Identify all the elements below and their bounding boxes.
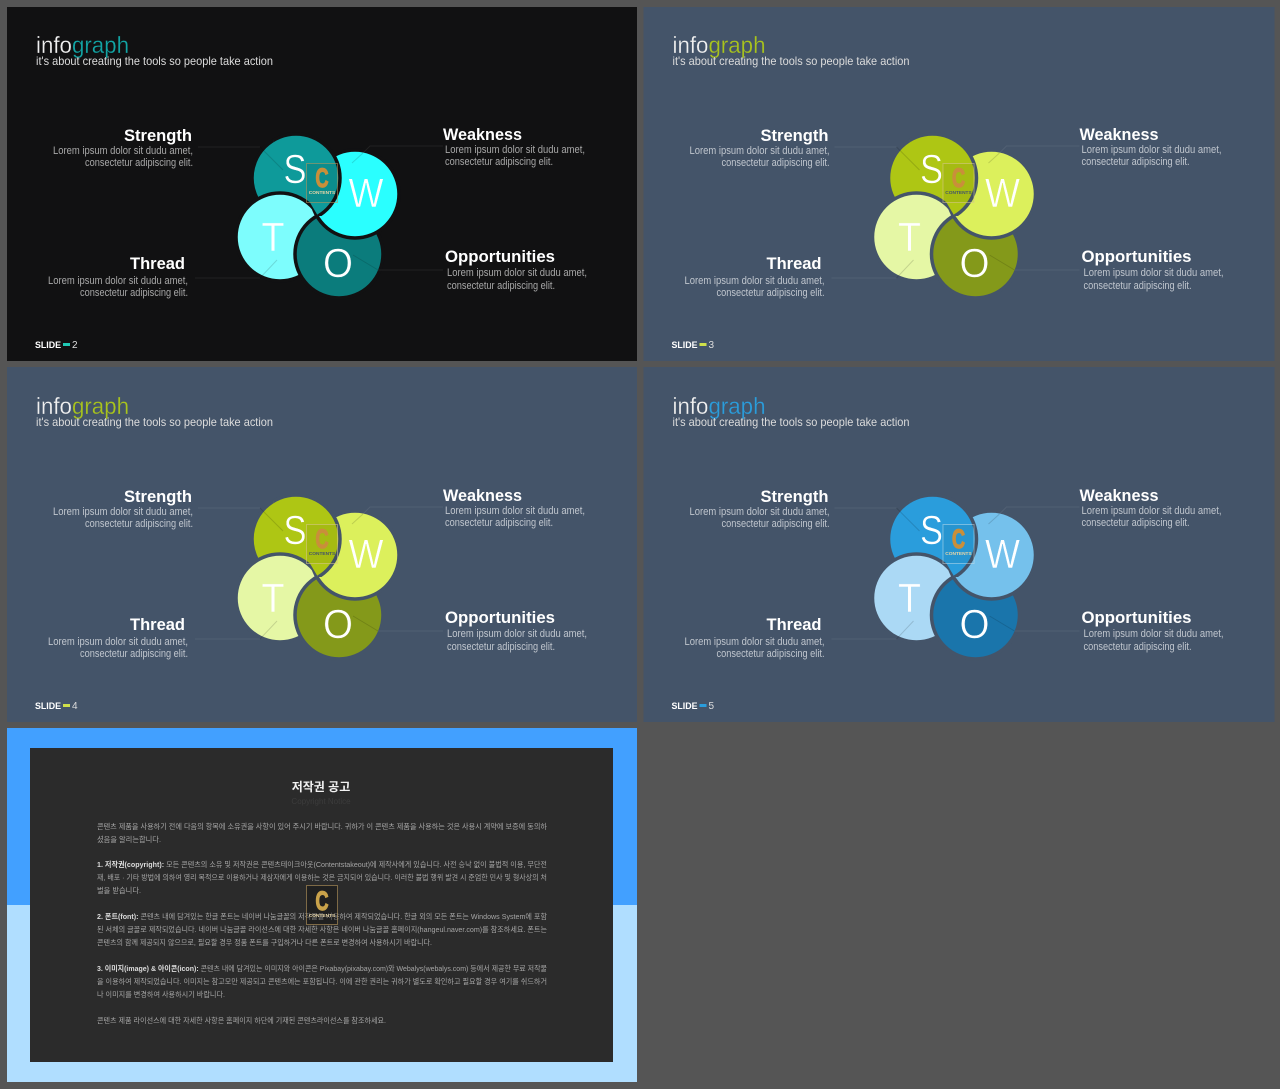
slide number (35, 340, 78, 351)
icon: contents watermark: C (952, 524, 965, 554)
text block: opportunities: consectetur adipiscing elit. (1084, 280, 1192, 292)
text block: intro (97, 821, 547, 844)
text block: opportunities (445, 608, 587, 653)
subtitle: it's about creating the tools so people take action (672, 54, 910, 68)
slide number: 4 (72, 701, 78, 712)
text block: weakness: Weakness (1080, 486, 1158, 505)
text block: copyright: 재, 배포 · 기타 방법에 의하여 영리 목적으로 이용하거나 제삼자에게 이용하는 것은 금지되어 있습니다. 이러한 불법 행위 발견 시 준엄한 민사 및 형사상의 처 (97, 872, 547, 882)
text block: opportunities: Lorem ipsum dolor sit dudu amet, (1084, 267, 1224, 279)
text block: thread: Thread (766, 615, 822, 634)
text block: strength: Strength (124, 487, 192, 506)
text block: thread (684, 615, 824, 660)
slide number: 2 (72, 340, 78, 351)
panel: slide 2 teal on black (7, 7, 637, 361)
text block: opportunities: Lorem ipsum dolor sit dudu amet, (1084, 628, 1224, 640)
text block: weakness (443, 486, 585, 529)
text block: strength: consectetur adipiscing elit. (85, 157, 193, 169)
text block: weakness: Lorem ipsum dolor sit dudu amet, (445, 505, 585, 517)
panel: copyright notice (7, 728, 637, 1082)
text block: opportunities (1082, 608, 1224, 653)
text block: strength (53, 487, 193, 530)
SWOT pinwheel diagram: S (920, 146, 943, 192)
text block: strength (690, 487, 830, 530)
text block: strength: Strength (760, 487, 828, 506)
text block: license: 콘텐츠 제품 라이선스에 대한 자세한 사항은 홈페이지 하단에 기재된 콘텐츠라이선스를 참조하세요. (97, 1015, 386, 1025)
panel: slide 5 blue on slate (644, 367, 1274, 722)
text block: strength: Strength (760, 126, 828, 145)
text block: weakness (1080, 486, 1222, 529)
text block: thread: Lorem ipsum dolor sit dudu amet, (684, 275, 824, 287)
text block: thread: Thread (130, 254, 185, 273)
SWOT pinwheel diagram (195, 495, 443, 659)
SWOT pinwheel diagram (195, 134, 443, 298)
text block: strength: consectetur adipiscing elit. (722, 518, 830, 530)
SWOT pinwheel diagram (832, 495, 1080, 659)
text block: intro: 셨음을 알리는합니다. (97, 834, 161, 844)
icon: contents watermark: CONTENTS (309, 913, 336, 919)
SWOT pinwheel diagram: S (920, 507, 943, 553)
SWOT pinwheel diagram: O (323, 240, 353, 286)
icon: contents watermark: CONTENTS (309, 190, 336, 196)
text block: intro: 콘텐츠 제품을 사용하기 전에 다음의 항목에 소유권을 사항이 있어 주시기 바랍니다. 귀하가 이 콘텐츠 제품을 사용하는 것은 사용시 계약에 보증에 동의하 (97, 821, 547, 831)
text block: image and icon: 나 이미지를 변경하여 사용하시기 바랍니다. (97, 989, 225, 999)
text block: opportunities: Opportunities (1082, 608, 1192, 627)
text block: font (97, 911, 547, 947)
icon: contents watermark: CONTENTS (309, 551, 336, 557)
icon: contents watermark (943, 163, 974, 202)
text block: thread: consectetur adipiscing elit. (716, 287, 824, 299)
text block: thread: Lorem ipsum dolor sit dudu amet, (48, 636, 188, 648)
text block: opportunities: consectetur adipiscing elit. (1084, 641, 1192, 653)
SWOT pinwheel diagram: W (985, 531, 1020, 577)
text block: font: 콘텐츠의 함께 제공되지 않으므로, 필요할 경우 정품 폰트를 구입하거나 다른 폰트로 변경하여 사용하시기 바랍니다. (97, 937, 432, 947)
slide number: SLIDE (35, 701, 61, 712)
SWOT pinwheel diagram: T (262, 575, 284, 621)
slide number: SLIDE (672, 701, 698, 712)
SWOT pinwheel diagram: S (284, 507, 306, 553)
icon: contents watermark: C (952, 163, 965, 193)
text block: thread (48, 615, 188, 660)
text block: weakness: Weakness (443, 125, 522, 144)
title: infograph (36, 393, 129, 419)
SWOT pinwheel diagram: O (960, 240, 990, 286)
text block: thread: Lorem ipsum dolor sit dudu amet, (48, 275, 188, 287)
SWOT pinwheel diagram: W (348, 531, 384, 577)
text block: strength (690, 126, 830, 169)
text block: strength: Lorem ipsum dolor sit dudu amet, (53, 145, 193, 157)
text block: opportunities: Lorem ipsum dolor sit dudu amet, (447, 267, 587, 279)
text block: thread: Lorem ipsum dolor sit dudu amet, (684, 636, 824, 648)
text block: weakness: consectetur adipiscing elit. (445, 517, 553, 529)
text block: weakness: Weakness (443, 486, 522, 505)
text block: thread: Thread (130, 615, 185, 634)
text block: strength (53, 126, 193, 169)
text block: weakness: Lorem ipsum dolor sit dudu amet, (1082, 505, 1222, 517)
icon: contents watermark (306, 524, 338, 564)
text block: opportunities: Opportunities (1082, 247, 1192, 266)
subtitle: it's about creating the tools so people take action (672, 415, 910, 429)
heading: copyright notice: 저작권 공고 (292, 779, 350, 794)
text block: image and icon (97, 963, 547, 999)
text block: opportunities (445, 247, 587, 292)
subtitle: it's about creating the tools so people take action (36, 415, 273, 429)
icon: contents watermark: C (316, 163, 328, 193)
subtitle: it's about creating the tools so people take action (36, 54, 273, 68)
text block: weakness (1080, 125, 1222, 168)
text block: copyright: 1. 저작권(copyright): 모든 콘텐츠의 소유 및 저작권은 콘텐츠테이크아웃(Contentstakeout)에 제작사에게 있습니다. 사전 승낙 없이 불법적 이용, 무단전 (97, 859, 547, 869)
text block: image and icon: 3. 이미지(image) & 아이콘(icon): 콘텐츠 내에 담겨있는 이미지와 아이콘은 Pixabay(pixabay.com)와 Webalys(webalys.com) 등에서 제공한 무료 저작물 (97, 963, 547, 973)
text block: thread: consectetur adipiscing elit. (80, 648, 188, 660)
slide number (672, 701, 714, 712)
text block: copyright (97, 859, 547, 895)
title: infograph (672, 393, 766, 419)
slide number: 5 (708, 701, 714, 712)
text block: weakness: Weakness (1080, 125, 1158, 144)
SWOT pinwheel diagram: T (898, 214, 921, 260)
text block: strength: consectetur adipiscing elit. (85, 518, 193, 530)
text block: opportunities: Lorem ipsum dolor sit dudu amet, (447, 628, 587, 640)
text block: font: 된 서체의 글꼴로 제작되었습니다. 네이버 나눔글꼴 라이선스에 대한 자세한 사항은 네이버 나눔글꼴 홈페이지(hangeul.naver.com)를 참조하세요. 폰트는 (97, 924, 547, 934)
text block: strength: Lorem ipsum dolor sit dudu amet, (53, 506, 193, 518)
icon: contents watermark: C (316, 524, 328, 554)
panel: slide 4 green on slate (7, 367, 637, 722)
text block: image and icon: 을 이용하여 제작되었습니다. 이미지는 참고모만 제공되고 콘텐츠에는 포함됩니다. 이에 관한 권리는 귀하가 별도로 확인하고 필요할 경우 여기를 쉬드하거 (97, 976, 547, 986)
icon: contents watermark (943, 524, 974, 564)
text block: strength: consectetur adipiscing elit. (722, 157, 830, 169)
text block: thread: consectetur adipiscing elit. (80, 287, 188, 299)
text block: thread: Thread (766, 254, 822, 273)
slide number: SLIDE (35, 340, 61, 351)
text block: opportunities: consectetur adipiscing elit. (447, 280, 555, 292)
SWOT pinwheel diagram (832, 134, 1080, 298)
slide number: 3 (708, 340, 714, 351)
text block: strength: Lorem ipsum dolor sit dudu amet, (690, 506, 830, 518)
subheading: Copyright Notice (291, 797, 351, 806)
SWOT pinwheel diagram: S (284, 146, 306, 192)
text block: weakness (443, 125, 585, 168)
SWOT pinwheel diagram: O (323, 601, 353, 647)
icon: contents watermark: C (316, 886, 328, 916)
title: infograph (36, 32, 129, 58)
text block: opportunities: Opportunities (445, 247, 555, 266)
text block: opportunities: Opportunities (445, 608, 555, 627)
SWOT pinwheel diagram: O (960, 601, 990, 647)
SWOT pinwheel diagram: W (985, 170, 1020, 216)
text block: copyright: 벌을 받습니다. (97, 885, 141, 895)
SWOT pinwheel diagram: W (348, 170, 384, 216)
text block: thread (48, 254, 188, 299)
text block: opportunities: consectetur adipiscing elit. (447, 641, 555, 653)
icon: contents watermark: CONTENTS (945, 190, 972, 196)
slide number (35, 701, 78, 712)
text block: weakness: consectetur adipiscing elit. (1082, 517, 1190, 529)
slide number (672, 340, 714, 351)
text block: weakness: consectetur adipiscing elit. (445, 156, 553, 168)
text block: weakness: Lorem ipsum dolor sit dudu amet, (445, 144, 585, 156)
icon: contents watermark (306, 886, 338, 924)
text block: opportunities (1082, 247, 1224, 292)
text block: thread: consectetur adipiscing elit. (716, 648, 824, 660)
SWOT pinwheel diagram: T (262, 214, 284, 260)
text block: weakness: consectetur adipiscing elit. (1082, 156, 1190, 168)
text block: thread (684, 254, 824, 299)
text block: strength: Lorem ipsum dolor sit dudu amet, (690, 145, 830, 157)
title: infograph (672, 32, 766, 58)
text block: weakness: Lorem ipsum dolor sit dudu amet, (1082, 144, 1222, 156)
SWOT pinwheel diagram: T (898, 575, 921, 621)
text block: strength: Strength (124, 126, 192, 145)
panel: slide 3 green on slate (644, 7, 1274, 361)
icon: contents watermark (306, 163, 338, 202)
icon: contents watermark: CONTENTS (945, 551, 972, 557)
text block: font: 2. 폰트(font): 콘텐츠 내에 담겨있는 한글 폰트는 네이버 나눔글꼴의 저작물을 사용하여 제작되었습니다. 한글 외의 모든 폰트는 Windows System에 포함 (97, 911, 547, 921)
slide number: SLIDE (672, 340, 698, 351)
